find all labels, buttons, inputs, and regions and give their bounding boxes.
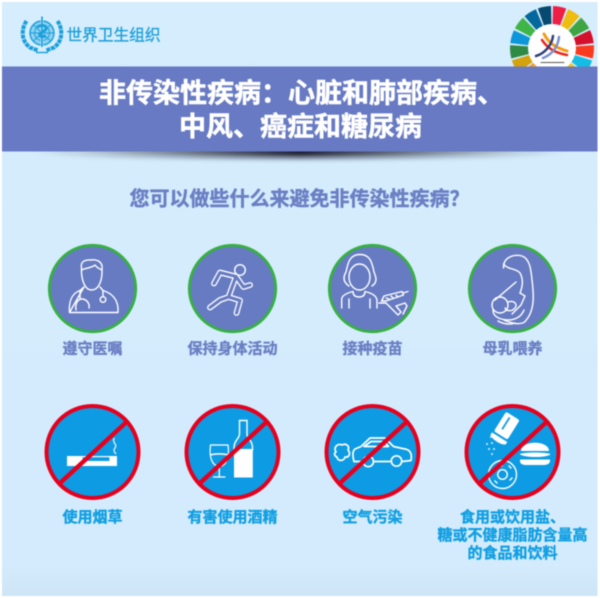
SDG wheel logo [505, 1, 599, 95]
wheel hub [528, 24, 576, 72]
banner shadow [30, 144, 570, 158]
item: tobacco use [46, 406, 138, 526]
icon: WHO emblem [23, 16, 61, 52]
item: vaccination [329, 245, 416, 358]
label: 使用烟草 [62, 508, 123, 526]
icon: no smoking [46, 406, 138, 498]
banner background [2, 66, 598, 152]
item: harmful use of alcohol [186, 406, 278, 526]
label: 食用或饮用盐、 [460, 508, 565, 526]
label: 的食品和饮料 [467, 544, 558, 562]
title: 非传染性疾病：心脏和肺部疾病、 [99, 78, 504, 108]
icon: doctor [49, 245, 136, 332]
label: 遵守医嘱 [62, 340, 123, 358]
WHO logo [23, 16, 161, 52]
label: 糖或不健康脂肪含量高 [437, 526, 588, 544]
label: 空气污染 [342, 508, 403, 526]
label: 有害使用酒精 [187, 508, 278, 526]
label: 保持身体活动 [187, 340, 278, 358]
icon: woman receiving injection [329, 245, 416, 332]
icon: runner [189, 245, 276, 332]
title: 中风、癌症和糖尿病 [179, 112, 422, 142]
item: air pollution [326, 406, 418, 526]
item: breastfeeding [469, 245, 556, 358]
icon: no alcohol [186, 406, 278, 498]
label: 接种疫苗 [342, 340, 403, 358]
item: follow medical advice [49, 245, 136, 358]
wheel centre emblem [536, 34, 567, 62]
item: unhealthy food and drink [437, 406, 588, 562]
organisation name: 世界卫生组织 [66, 26, 161, 44]
item: physical activity [187, 245, 278, 358]
icon: no salt, sugar or fatty food [466, 406, 558, 498]
wheel segments [505, 1, 599, 95]
label [437, 508, 588, 562]
icon: mother and baby [469, 245, 556, 332]
title [99, 78, 504, 142]
label: 母乳喂养 [482, 340, 543, 358]
icon: no car exhaust [326, 406, 418, 498]
title banner [2, 66, 598, 152]
subtitle question: 您可以做些什么来避免非传染性疾病？ [130, 186, 470, 210]
